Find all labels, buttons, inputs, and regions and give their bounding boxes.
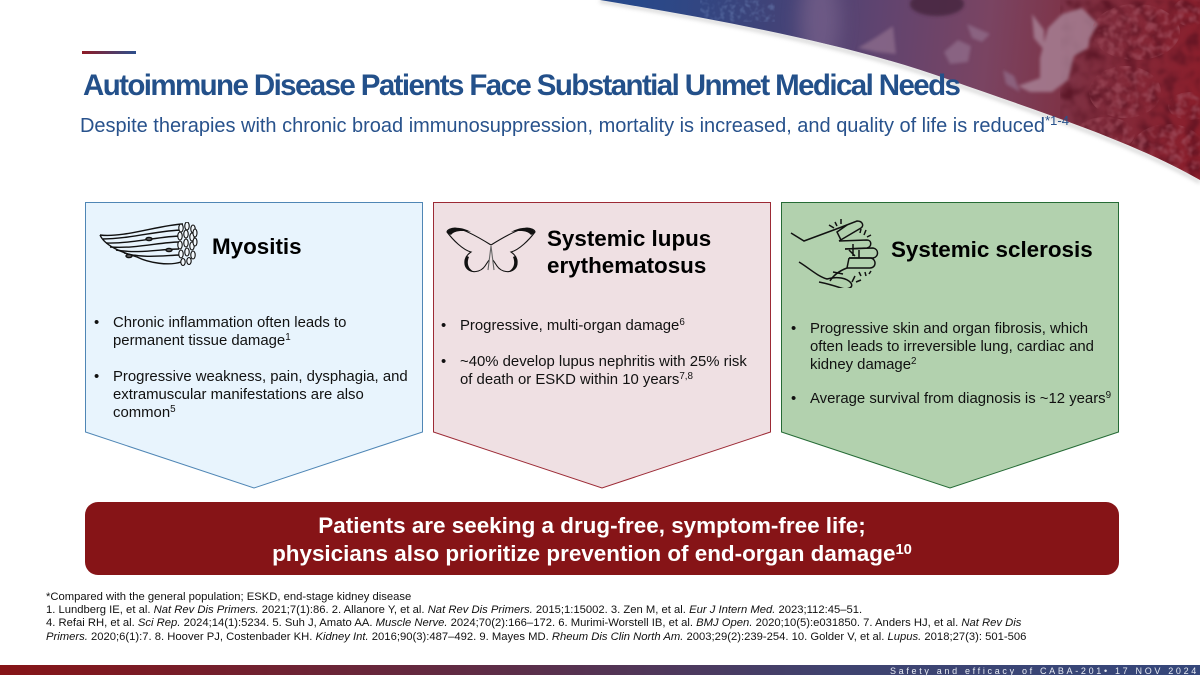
bullets: myositis: permanent tissue damage1 [113,332,291,349]
bullets: myositis: Progressive weakness, pain, dysphagia, and [113,369,408,385]
panel: myositis: • [94,315,99,331]
callout banner: physicians also prioritize prevention of end-organ damage10 [272,541,912,566]
bullets: sclerosis: Progressive skin and organ fibrosis, which [810,321,1088,337]
bullets: myositis [94,315,408,421]
bullets: lupus [441,317,747,388]
footer gradient bar [0,665,1200,675]
icon: muscle fibres [99,222,198,266]
bullets: myositis: extramuscular manifestations are also [113,387,364,403]
heading: myositis: Myositis [212,234,302,259]
panel shape: sclerosis [781,202,1119,488]
panel: systemic lupus erythematosus: • [441,354,446,370]
heading: lupus: erythematosus [547,253,706,278]
subtitle: Despite therapies with chronic broad immunosuppression, mortality is increased, and quality of life is reduced*1-4 [80,113,1069,137]
bullets: lupus: of death or ESKD within 10 years7,8 [460,371,693,388]
bullets: myositis: Chronic inflammation often leads to [113,315,346,331]
bullets: lupus: Progressive, multi-organ damage6 [460,317,685,334]
icon: hand [790,219,878,288]
title accent line [82,51,136,54]
footnotes and references: 4. Refai RH, et al. Sci Rep. 2024;14(1):5234. 5. Suh J, Amato AA. Muscle Nerve. 2024;70(2):166–172. 6. Murimi-Worstell IB, et al. BMJ Open. 2020;10(5):e031850. 7. Anders HJ, et al. Nat Rev Dis [46,617,1021,629]
panel: systemic sclerosis: • [791,391,796,407]
panel: systemic lupus erythematosus [433,202,771,488]
callout banner [85,502,1119,575]
bullets: lupus: ~40% develop lupus nephritis with 25% risk [460,354,747,370]
panel: myositis [85,202,423,488]
panel shape: myositis [85,202,423,488]
heading: sclerosis: Systemic sclerosis [891,237,1093,262]
footnotes and references: *Compared with the general population; ESKD, end-stage kidney disease [46,590,411,602]
bullets: myositis: common5 [113,404,176,421]
callout banner: Patients are seeking a drug-free, symptom-free life; [318,513,866,538]
corner banner image [599,0,1200,184]
footnotes and references: 1. Lundberg IE, et al. Nat Rev Dis Primers. 2021;7(1):86. 2. Allanore Y, et al. Nat Rev Dis Primers. 2015;1:15002. 3. Zen M, et al. Eur J Intern Med. 2023;112:45–51. [46,604,862,616]
bullets: sclerosis [791,321,1111,407]
bullets: sclerosis: often leads to irreversible lung, cardiac and [810,339,1094,355]
bullets: sclerosis: kidney damage2 [810,356,916,373]
panel: systemic sclerosis: • [791,321,796,337]
heading: lupus: Systemic lupus [547,226,711,251]
bullets: sclerosis: Average survival from diagnosis is ~12 years9 [810,390,1111,407]
panel shape: lupus [433,202,771,488]
icon: butterfly [446,228,536,272]
panel: myositis: • [94,369,99,385]
footnotes and references: Primers. 2020;6(1):7. 8. Hoover PJ, Costenbader KH. Kidney Int. 2016;90(3):487–492. 9. Mayes MD. Rheum Dis Clin North Am. 2003;29(2):239-254. 10. Golder V, et al. Lupus. 2018;27(3): 501-506 [46,631,1026,643]
panel: systemic sclerosis [781,202,1119,488]
footer text: Safety and efficacy of CABA-201• 17 NOV 2024 [890,666,1199,676]
footnotes and references [46,590,1026,643]
title: Autoimmune Disease Patients Face Substantial Unmet Medical Needs [83,69,959,102]
heading: lupus [547,226,711,278]
panel: systemic lupus erythematosus: • [441,318,446,334]
